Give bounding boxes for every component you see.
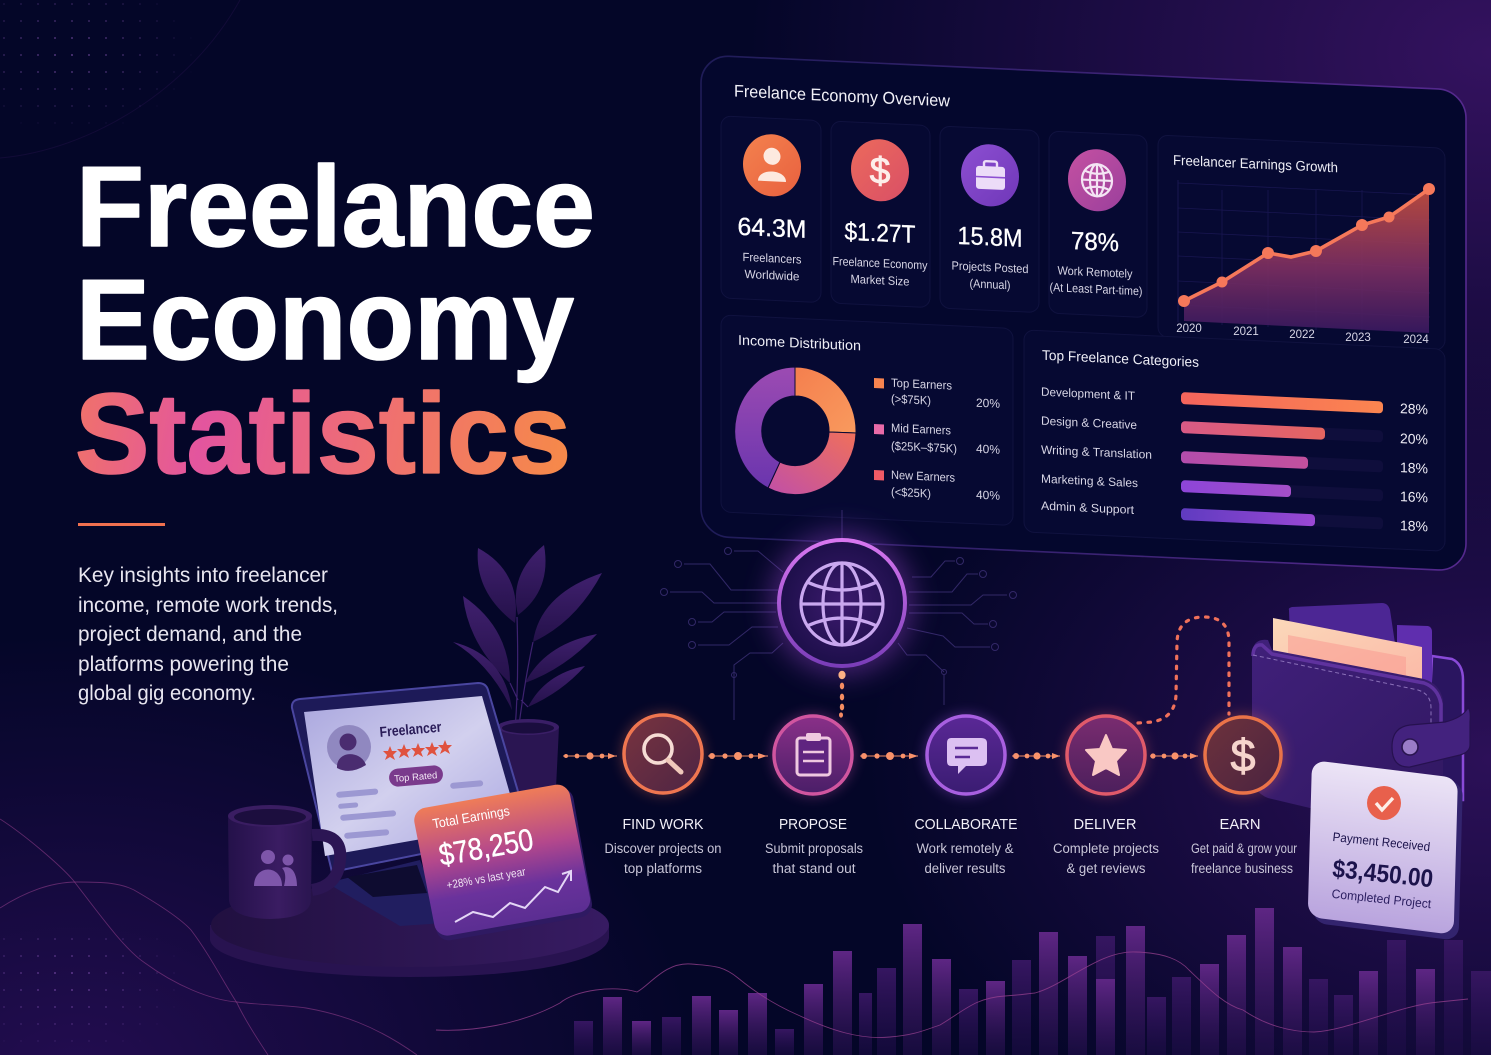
decorative bar chart backdrop (574, 908, 1491, 1055)
legend: Mid Earners (891, 421, 951, 438)
back cards (1289, 603, 1432, 690)
chart: freelancer earnings growth: 2023 (1345, 332, 1371, 344)
legend: (>$75K) (891, 392, 931, 408)
callout: total earnings card: Total Earnings (431, 803, 511, 831)
stat card: work remotely: 78% (1071, 227, 1119, 257)
sparkline with arrow (455, 871, 571, 922)
intro paragraph: platforms powering the (78, 653, 289, 676)
stat card: work remotely: Work Remotely (1058, 263, 1133, 281)
title: Statistics (75, 371, 571, 498)
card: top freelance categories: 18% (1400, 517, 1428, 534)
connector dotted lines between steps (563, 752, 1198, 760)
card: top freelance categories: 20% (1400, 430, 1428, 447)
illustration: mug (228, 805, 340, 919)
chart: freelancer earnings growth: 2021 (1233, 326, 1259, 338)
title: Economy (76, 257, 574, 384)
step 4: deliver: DELIVER (1074, 816, 1137, 833)
intro paragraph: income, remote work trends, (78, 594, 338, 617)
card: income distribution (721, 315, 1013, 525)
chart: freelancer earnings growth (1176, 180, 1435, 346)
illustration: platform (210, 883, 609, 977)
legend: Top Earners (891, 376, 952, 393)
card: top freelance categories: 18% (1400, 459, 1428, 476)
connector: looping dashed path deliver to earn (1138, 617, 1229, 723)
peach card (1273, 618, 1422, 690)
intro paragraph: project demand, and the (78, 623, 302, 646)
step 5: earn: Get paid & grow your (1191, 841, 1297, 856)
badge: top rated (388, 765, 444, 787)
card: top freelance categories (1024, 330, 1445, 551)
title: Freelance (76, 144, 595, 271)
legend: (<$25K) (891, 485, 931, 501)
card: earnings growth chart background and title (1158, 135, 1445, 350)
illustration: laptop (292, 683, 530, 926)
stat card: freelancers (721, 116, 821, 303)
badge: top rated: Top Rated (394, 770, 438, 785)
legend (874, 375, 1000, 504)
wallet illustration (1252, 603, 1470, 808)
stat card: market size: Market Size (850, 272, 910, 289)
stat card: market size: $ (870, 149, 890, 192)
legend: 20% (976, 396, 1000, 411)
intro paragraph: Key insights into freelancer (78, 564, 328, 587)
stat card: projects posted (940, 126, 1039, 313)
step 5: earn: freelance business (1191, 861, 1293, 876)
stat card: market size (831, 121, 930, 308)
step 4: deliver: Complete projects (1053, 841, 1159, 856)
stat card: projects posted: (Annual) (970, 276, 1011, 292)
icon: check badge (1367, 786, 1401, 820)
callout: total earnings card: $78,250 (436, 822, 536, 873)
legend: 40% (976, 442, 1000, 457)
stat card: work remotely (1049, 131, 1147, 318)
step 3: collaborate: COLLABORATE (914, 816, 1018, 833)
step 3: collaborate (914, 713, 1018, 876)
step 4: deliver (1053, 713, 1159, 876)
wallet strap (1392, 708, 1470, 767)
chart: freelancer earnings growth: 2024 (1403, 334, 1429, 346)
callout: payment received card: Payment Received (1332, 830, 1431, 854)
avatar (327, 725, 371, 771)
step 4: deliver: & get reviews (1066, 861, 1146, 876)
step 1: find work (604, 712, 722, 876)
circuit lines around globe (660, 510, 1016, 720)
card: top freelance categories: 28% (1400, 400, 1428, 417)
stat card: market size: Freelance Economy (832, 254, 927, 272)
card: top freelance categories: Design & Creative (1041, 414, 1137, 432)
callout: payment received card: Completed Project (1331, 887, 1432, 911)
stat card: projects posted: Projects Posted (952, 259, 1029, 276)
step 3: collaborate: Work remotely & (916, 841, 1014, 856)
step 1: find work: FIND WORK (622, 816, 704, 833)
card: top freelance categories: Admin & Support (1041, 499, 1135, 517)
title accent rule (78, 523, 165, 526)
illustration: laptop: Freelancer (379, 720, 442, 741)
stat card: projects posted: 15.8M (958, 222, 1022, 253)
card: earnings growth chart background and title: Freelancer Earnings Growth (1173, 152, 1338, 175)
step 1: find work: top platforms (624, 861, 702, 876)
card: top freelance categories: Top Freelance Categories (1042, 347, 1199, 370)
step 5: earn (1191, 713, 1297, 876)
callout: payment received card: $3,450.00 (1331, 855, 1435, 893)
card: top freelance categories: 16% (1400, 488, 1428, 505)
step 1: find work: Discover projects on (604, 841, 722, 856)
step 5: earn: EARN (1220, 816, 1260, 833)
stat card: freelancers: Worldwide (744, 267, 800, 284)
star rating (383, 740, 452, 760)
stat card: freelancers: 64.3M (738, 213, 807, 244)
illustration: plant (453, 545, 602, 800)
chart: income distribution donut (735, 367, 856, 495)
panel heading: Freelance Economy Overview (734, 82, 951, 111)
callout: total earnings card (412, 782, 594, 943)
step 2: propose: that stand out (772, 861, 856, 876)
step 5: earn: $ (1230, 730, 1256, 781)
stat card: work remotely: (At Least Part-time) (1050, 280, 1143, 298)
callout: payment received card (1308, 760, 1463, 941)
connector: globe to process (838, 671, 846, 718)
back panel (1425, 656, 1463, 800)
legend: ($25K–$75K) (891, 439, 957, 456)
intro paragraph: global gig economy. (78, 682, 256, 705)
chart: freelancer earnings growth: 2022 (1289, 329, 1315, 341)
panel: freelance economy overview dashboard (701, 55, 1466, 571)
legend: 40% (976, 488, 1000, 503)
decorative wave lines (0, 819, 1468, 1055)
stat card: market size: $1.27T (844, 218, 915, 249)
step 2: propose: PROPOSE (779, 816, 847, 833)
stat card: freelancers: Freelancers (743, 250, 802, 267)
chart: freelancer earnings growth: 2020 (1176, 323, 1202, 335)
title (75, 144, 595, 498)
card: top freelance categories: Marketing & Sales (1041, 472, 1138, 490)
step 2: propose: Submit proposals (765, 841, 863, 856)
step 3: collaborate: deliver results (924, 861, 1006, 876)
legend: New Earners (891, 468, 955, 485)
card: top freelance categories: Writing & Translation (1041, 443, 1152, 462)
step 2: propose (765, 713, 863, 876)
icon: people (254, 850, 297, 886)
card: top freelance categories: Development & IT (1041, 385, 1136, 403)
intro paragraph (78, 564, 338, 705)
icon: central globe (770, 531, 914, 675)
callout: total earnings card: +28% vs last year (446, 866, 527, 892)
card: income distribution: Income Distribution (738, 332, 861, 353)
